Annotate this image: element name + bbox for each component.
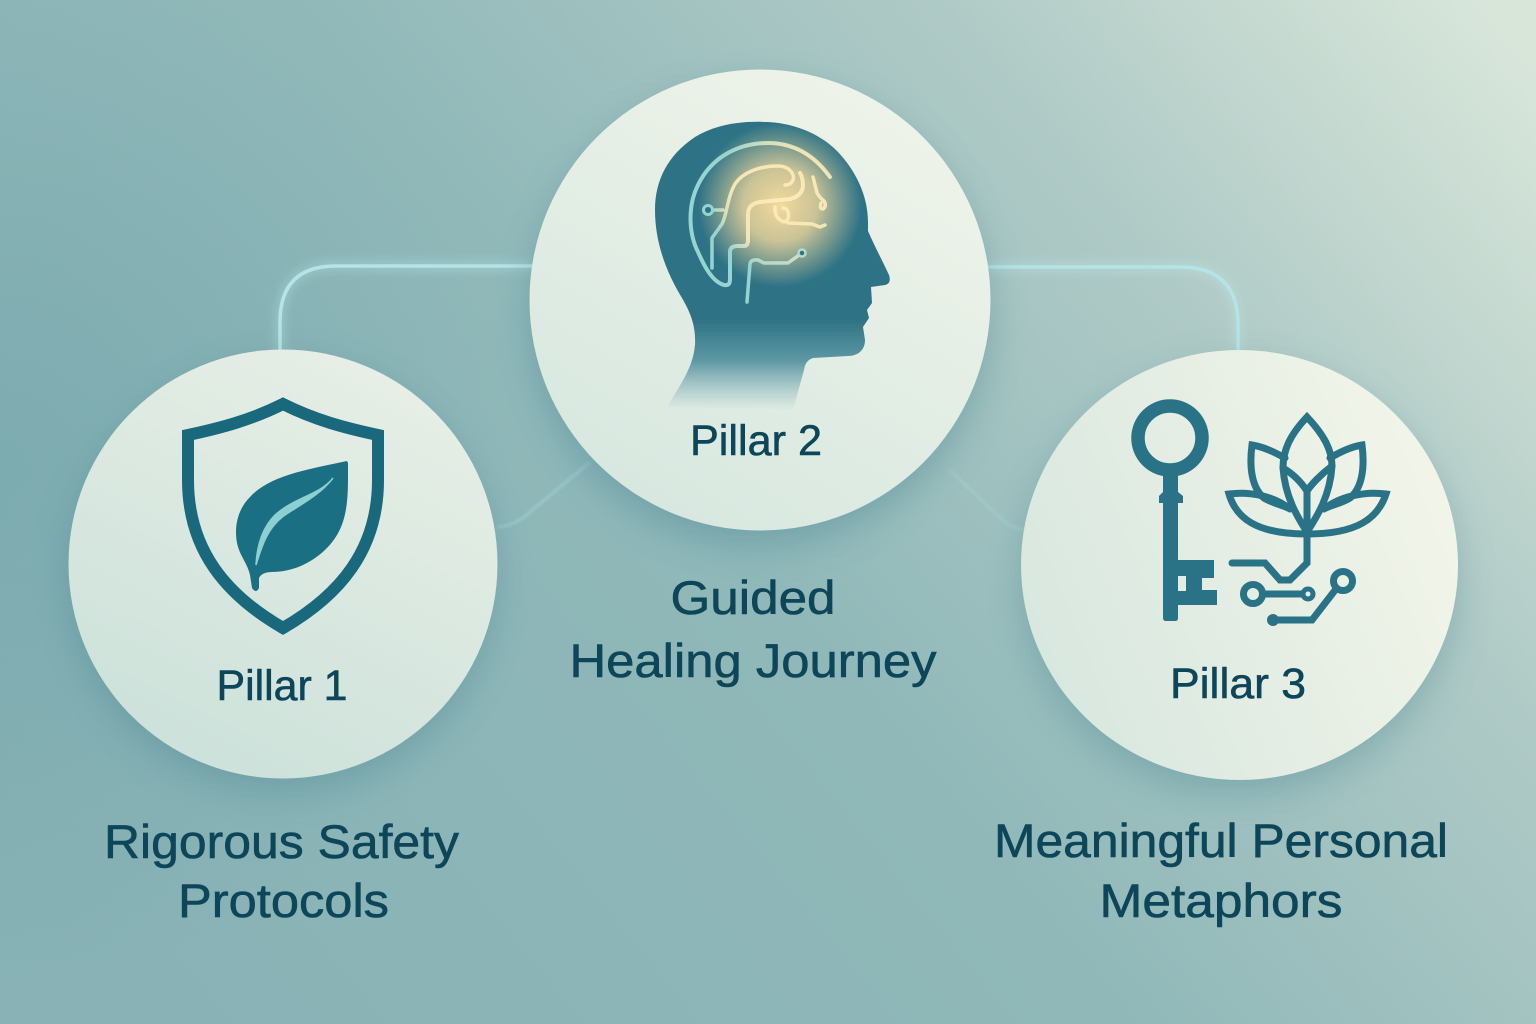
connector: pillar 2 to pillar 3	[950, 267, 1238, 530]
panel: pillar 1	[68, 350, 498, 790]
label: pillar 3: Pillar 3	[1170, 660, 1306, 708]
caption: pillar 3: Metaphors	[1100, 874, 1342, 927]
circuit lines	[690, 143, 830, 302]
caption: pillar 2: Guided	[670, 571, 836, 624]
icon: key	[1138, 406, 1217, 621]
icon: shield with leaf	[188, 404, 378, 628]
icon: head with glowing circuit brain	[655, 122, 890, 410]
panel: pillar 3	[1021, 350, 1458, 792]
caption: pillar 2: Healing Journey	[570, 634, 937, 687]
label: pillar 1: Pillar 1	[216, 662, 348, 710]
caption: pillar 1: Rigorous Safety	[104, 815, 460, 868]
caption: pillar 2	[570, 571, 937, 687]
label: pillar 2: Pillar 2	[690, 417, 822, 465]
caption: pillar 3: Meaningful Personal	[994, 814, 1448, 867]
connector: pillar 1 to pillar 2	[280, 266, 590, 527]
panel: pillar 2	[530, 70, 990, 543]
caption: pillar 1: Protocols	[178, 874, 389, 927]
caption: pillar 1	[104, 815, 460, 927]
icon: lotus with circuit roots	[1229, 417, 1386, 622]
caption: pillar 3	[994, 814, 1448, 927]
